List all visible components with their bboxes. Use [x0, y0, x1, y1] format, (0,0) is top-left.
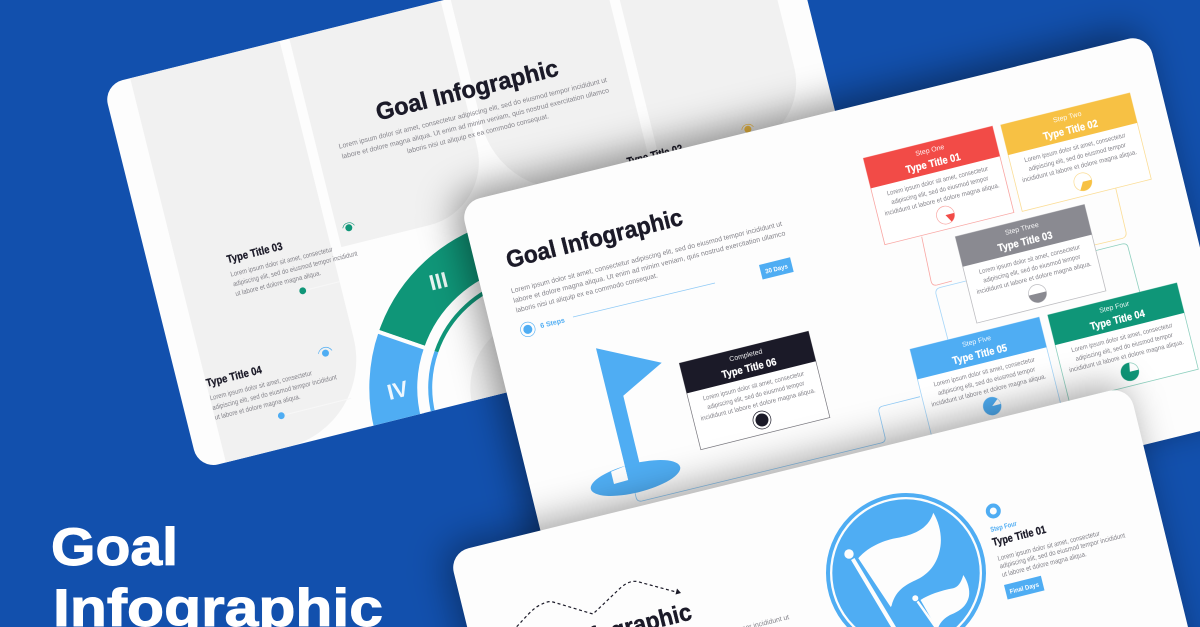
- steps marker: 6 Steps: [540, 317, 566, 330]
- card: step two: incididunt ut labore et dolore magna aliqua.: [1022, 149, 1138, 184]
- label III: III: [427, 267, 450, 296]
- segment III: [379, 232, 479, 346]
- block: type title 04: Lorem ipsum dolor sit amet, consectetur: [209, 370, 313, 402]
- block: type title 04: [205, 345, 352, 435]
- icon: round flags badge: [828, 495, 984, 627]
- intro text: Lorem ipsum dolor sit amet, consectetur adipiscing elit, sed do eiusmod tempor incididunt ut: [338, 77, 608, 151]
- hub: [470, 338, 506, 402]
- block: type title 03: Type Title 03: [226, 241, 284, 266]
- card: step two: Lorem ipsum dolor sit amet, consectetur: [1024, 132, 1127, 164]
- title: Goal Infographic: [503, 204, 686, 274]
- intro text: labore et dolore magna aliqua. Ut enim ad minim veniam, quis nostrud exercitation ullamco: [341, 87, 610, 161]
- block: type title 03: adipiscing elit, sed do eiusmod tempor incididunt: [232, 251, 358, 288]
- block: type title 04: Type Title 04: [205, 364, 264, 390]
- main heading: Goal: [51, 518, 178, 577]
- big flag: [844, 513, 969, 627]
- card: step three: adipiscing elit, sed do eiusmod tempor: [983, 253, 1082, 285]
- card: completed: Lorem ipsum dolor sit amet, consectetur: [702, 370, 806, 402]
- card: step five: adipiscing elit, sed do eiusmod tempor: [937, 366, 1037, 397]
- card: step one: Lorem ipsum dolor sit amet, consectetur: [886, 165, 990, 197]
- label IV: IV: [384, 376, 411, 405]
- text block: step four: Step Four: [990, 521, 1018, 534]
- segment IV: [369, 330, 425, 427]
- card: step three: Step Three: [1004, 222, 1040, 237]
- icon: pie 5: [981, 395, 1003, 417]
- icon: pie 3: [1027, 283, 1048, 304]
- text block: step four: [990, 521, 1126, 579]
- card: step three: Type Title 03: [997, 229, 1054, 255]
- connector lines: [632, 188, 1140, 501]
- heading block: [500, 181, 795, 338]
- inner ring teal: [434, 292, 483, 352]
- card: step four: incididunt ut labore et dolore magna aliqua.: [1069, 339, 1185, 374]
- text block: step four: Lorem ipsum dolor sit amet, consectetur: [997, 530, 1101, 563]
- card: step five: Type Title 05: [951, 342, 1009, 367]
- shadow of front slide: [441, 381, 1200, 627]
- block: type title 02: Type Title 02: [626, 143, 684, 168]
- icon: pie 1: [935, 204, 956, 226]
- title: Goal Infographic: [373, 55, 561, 126]
- intro text: laboris nisi ut aliquip ex ea commodo consequat.: [406, 113, 550, 155]
- card: step four: Type Title 04: [1089, 308, 1146, 333]
- icon: teal marker: [342, 221, 356, 233]
- text block: step four: ut labore et dolore magna aliqua.: [1001, 551, 1087, 579]
- block: type title 03: ut labore et dolore magna aliqua.: [235, 270, 322, 298]
- card: step five: Lorem ipsum dolor sit amet, consectetur: [933, 356, 1036, 388]
- icon: ring marker: [988, 506, 999, 516]
- intro text: laboris nisi ut aliquip ex ea commodo consequat.: [515, 272, 659, 315]
- card: completed: Type Title 06: [721, 356, 778, 381]
- panel: front slide: [449, 386, 1200, 627]
- shadow of middle slide: [450, 27, 1200, 583]
- card: completed: [679, 331, 830, 450]
- block: type title 03: Lorem ipsum dolor sit amet, consectetur: [230, 246, 334, 279]
- badge: final days: [1004, 576, 1045, 600]
- icon: pie 2: [1072, 171, 1094, 193]
- card: step three: Lorem ipsum dolor sit amet, consectetur: [978, 244, 1082, 276]
- badge: 30 days: 30 Days: [765, 263, 789, 276]
- card: step five: Step Five: [962, 335, 992, 349]
- inner ring blue: [428, 351, 438, 412]
- ring chart: [369, 232, 506, 427]
- icon: pie 6: [751, 409, 773, 431]
- card: step two: Type Title 02: [1042, 118, 1099, 143]
- block: type title 02: [625, 123, 756, 168]
- card: step one: Step One: [915, 144, 945, 158]
- icon: golf flag: [587, 348, 684, 503]
- panel: back slide: [107, 0, 835, 465]
- line to 30 days: [573, 283, 715, 317]
- card: step one: Type Title 01: [905, 151, 962, 176]
- steps marker: [519, 313, 567, 338]
- card: step four: [1048, 283, 1198, 401]
- card: step one: [863, 126, 1014, 245]
- main heading: [51, 518, 383, 627]
- card: step four: Step Four: [1099, 300, 1131, 315]
- badge: final days: Final Days: [1009, 582, 1040, 596]
- block: type title 03: [226, 223, 364, 310]
- panel: middle slide: [460, 34, 1200, 590]
- card: step one: incididunt ut labore et dolore magna aliqua.: [884, 182, 1000, 218]
- card: completed: incididunt ut labore et dolore magna aliqua.: [700, 387, 816, 423]
- card: step two: Step Two: [1052, 111, 1082, 125]
- small flag: [912, 595, 918, 601]
- intro text: labore et dolore magna aliqua. Ut enim ad minim veniam, quis nostrud exercitation ullamco: [513, 230, 786, 305]
- card: step four: Lorem ipsum dolor sit amet, consectetur: [1071, 322, 1174, 354]
- block: type title 04: ut labore et dolore magna aliqua.: [214, 394, 301, 422]
- icon: pie 4: [1119, 361, 1141, 383]
- card: step five: [910, 317, 1061, 436]
- card: completed: adipiscing elit, sed do eiusmod tempor: [707, 380, 806, 411]
- card: step three: incididunt ut labore et dolore magna aliqua.: [976, 261, 1092, 296]
- card: completed: Completed: [729, 348, 763, 363]
- dashed route arrow: [517, 581, 681, 627]
- text block: step four: Type Title 01: [991, 524, 1047, 549]
- card: step three: [955, 205, 1106, 323]
- icon: blue marker: [317, 346, 333, 358]
- intro text: Lorem ipsum dolor sit amet, consectetur adipiscing elit, sed do eiusmod tempor incididunt ut: [510, 221, 783, 295]
- column panels: [130, 0, 854, 462]
- card: step four: adipiscing elit, sed do eiusmod tempor: [1075, 332, 1174, 363]
- block: type title 04: adipiscing elit, sed do eiusmod tempor incididunt: [212, 374, 338, 412]
- text block: step four: adipiscing elit, sed do eiusmod tempor incididunt: [999, 532, 1126, 570]
- card: step two: adipiscing elit, sed do eiusmod tempor: [1028, 142, 1127, 173]
- card: step two: [1001, 93, 1151, 211]
- badge: 30 days: [759, 257, 794, 280]
- card: step one: adipiscing elit, sed do eiusmod tempor: [891, 175, 990, 206]
- card: step five: incididunt ut labore et dolore magna aliqua.: [931, 373, 1047, 409]
